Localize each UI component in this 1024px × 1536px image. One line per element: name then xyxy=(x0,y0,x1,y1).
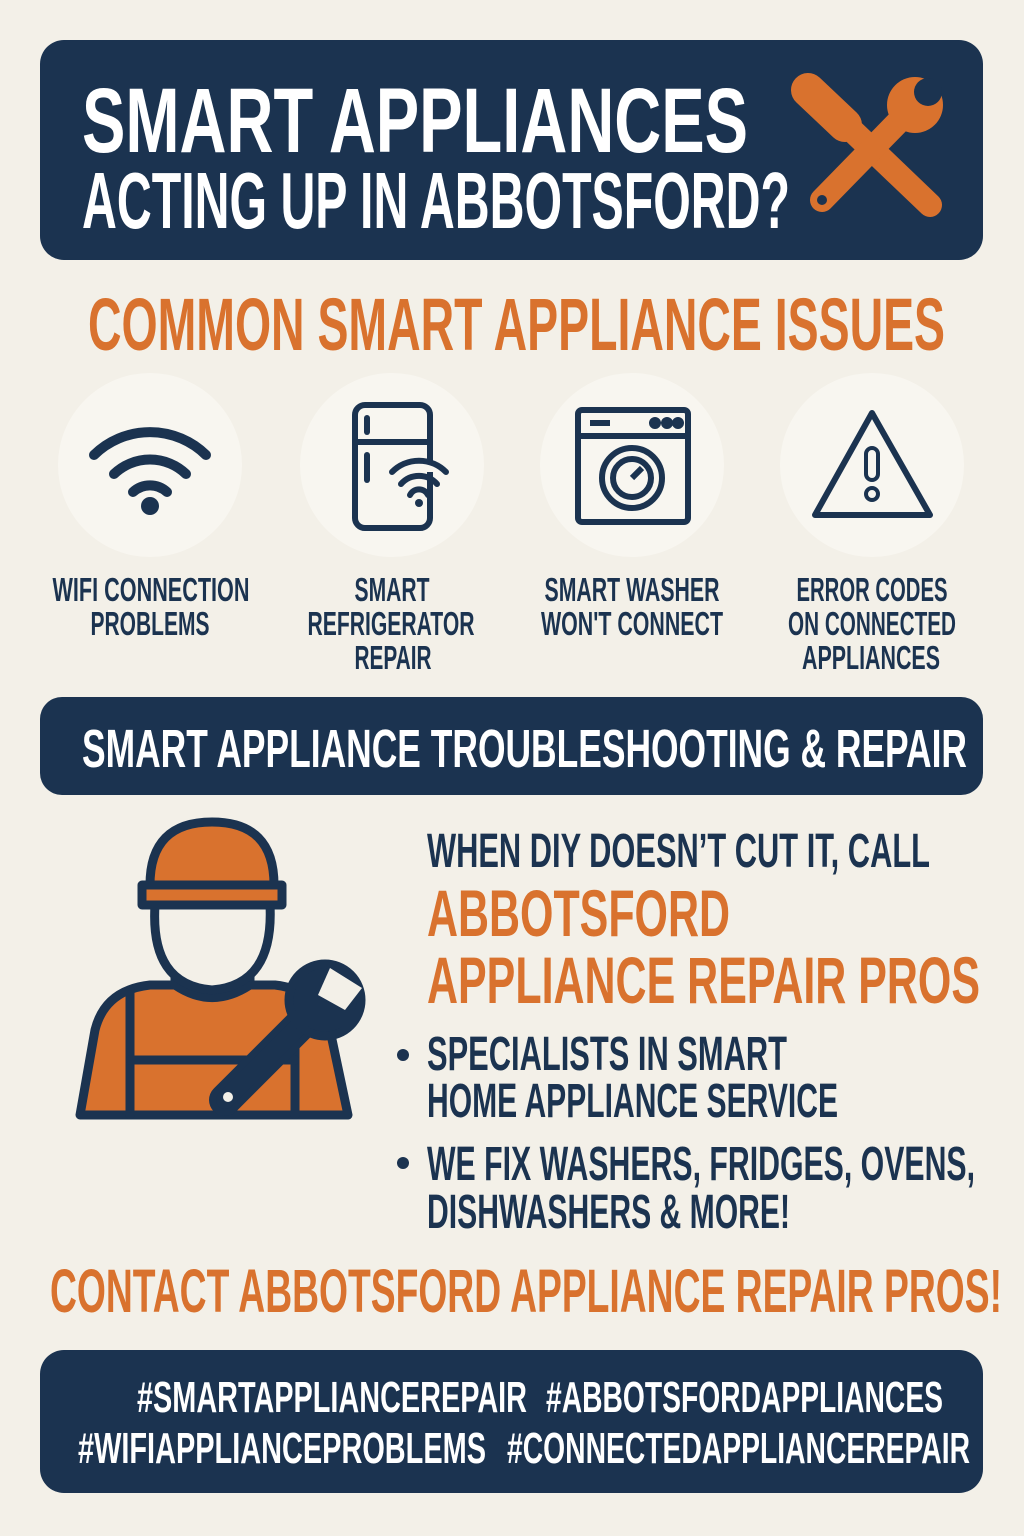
title xyxy=(82,70,790,245)
title: SMART APPLIANCES xyxy=(82,70,748,172)
icon: tools xyxy=(808,77,943,205)
issue labels: SMART WASHER xyxy=(544,571,720,608)
issue labels: APPLIANCES xyxy=(802,639,940,676)
footer: hashtags xyxy=(40,1350,983,1493)
icon: technician xyxy=(80,822,362,1115)
issue labels: WON'T CONNECT xyxy=(541,605,723,642)
bullet list: DISHWASHERS & MORE! xyxy=(427,1186,790,1239)
text block: call to pros xyxy=(427,825,980,1017)
icon: wifi xyxy=(58,373,242,557)
bullet list xyxy=(397,1028,975,1239)
bullet list: SPECIALISTS IN SMART xyxy=(427,1028,787,1081)
footer: hashtags: #SMARTAPPLIANCEREPAIR xyxy=(137,1373,527,1422)
issue labels xyxy=(52,571,956,676)
issue labels: SMART xyxy=(354,571,430,608)
issue labels: PROBLEMS xyxy=(90,605,210,642)
text block: call to pros: ABBOTSFORD xyxy=(427,876,730,950)
icon: smart fridge xyxy=(300,373,484,557)
issue labels: REPAIR xyxy=(354,639,432,676)
issue labels: REFRIGERATOR xyxy=(308,605,475,642)
icon: washer xyxy=(540,373,724,557)
issue labels: WIFI CONNECTION xyxy=(52,571,250,608)
banner: troubleshooting xyxy=(40,697,983,795)
header panel xyxy=(40,40,983,260)
icon: warning xyxy=(780,373,964,557)
footer: hashtags: #WIFIAPPLIANCEPROBLEMS xyxy=(78,1424,486,1473)
